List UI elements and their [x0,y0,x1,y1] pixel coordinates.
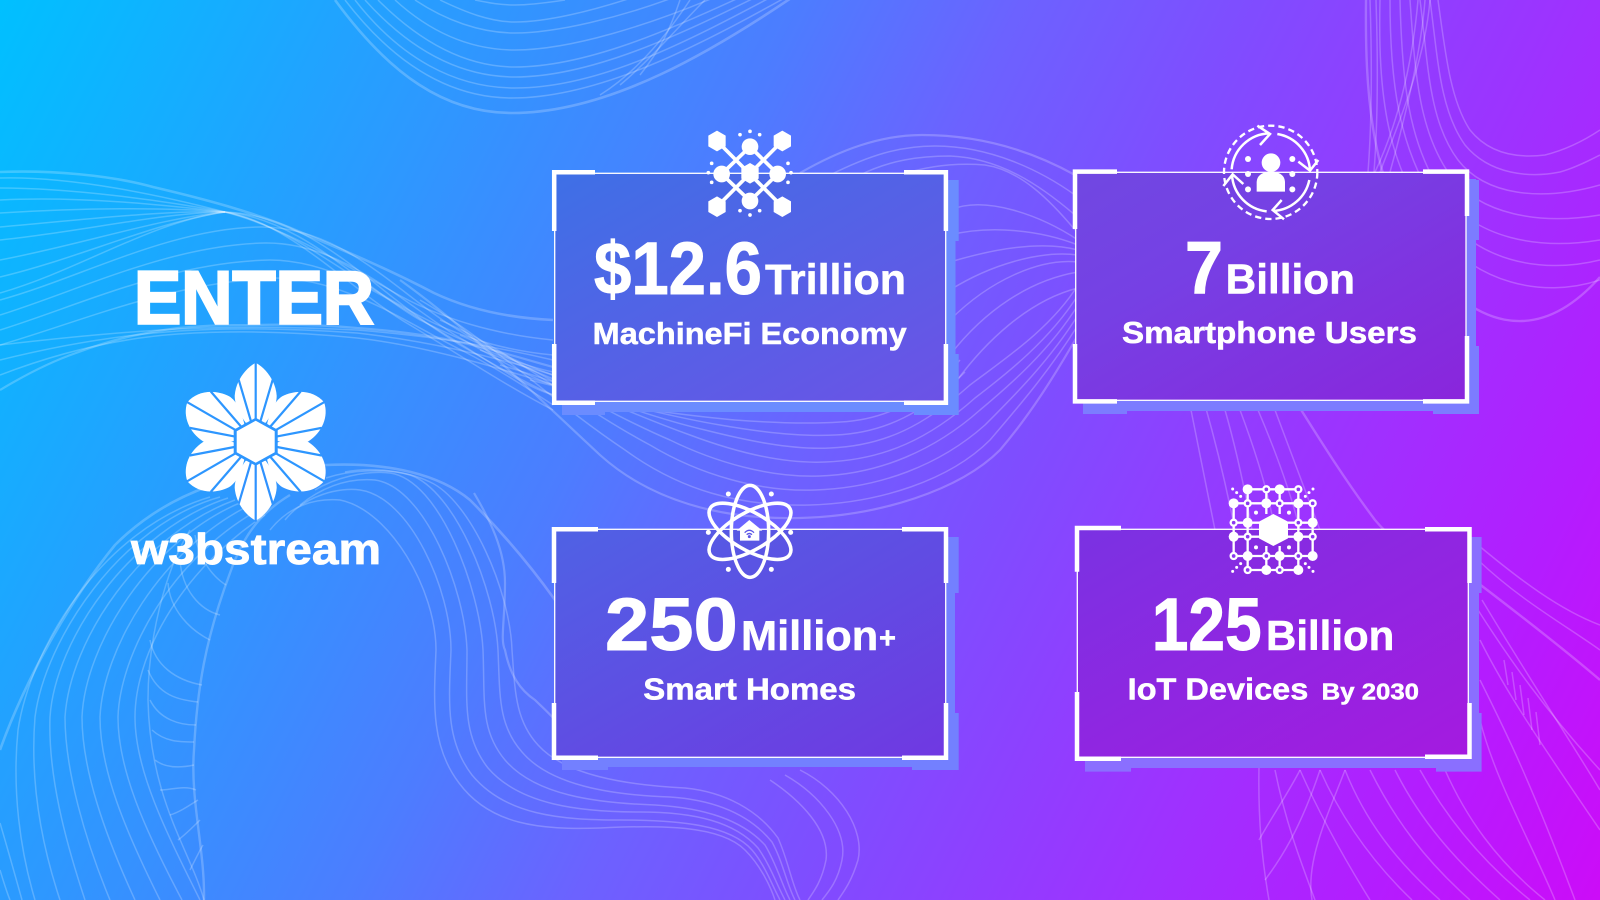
label: MachineFi Economy: MachineFi Economy [593,316,907,351]
label: IoT Devices By 2030 [1128,671,1419,706]
corner brackets [1077,528,1470,759]
figure: 250 Million+: + [879,622,896,655]
icon: atom with home [701,485,799,577]
panel: IoT devices [1077,484,1482,772]
figure: 250 Million+ [605,583,896,666]
corner brackets [554,529,946,758]
figure: $12.6 Trillion [594,227,906,310]
panel body [1077,529,1468,757]
figure: 125 Billion [1152,583,1394,666]
wordmark: w3bstream [130,525,381,574]
panel shadow [562,180,959,415]
panel body [555,529,946,757]
panel body [1076,172,1466,400]
figure: 7 Billion [1185,226,1355,309]
icon: network [706,129,793,217]
label: Smartphone Users: Smartphone Users [1122,315,1417,350]
panel: smartphone users [1075,126,1479,414]
panel: smart homes [554,485,959,770]
icon: user with cycle arrows [1223,126,1318,219]
label: IoT Devices By 2030: By 2030 [1322,678,1419,704]
panel shadow [1083,179,1479,414]
label: Smart Homes: Smart Homes [643,671,856,706]
panel: MachineFi economy [554,129,959,415]
figure: $12.6 Trillion: $12.6 [594,227,762,310]
corner brackets [554,172,946,403]
figure: 250 Million+: Million [741,612,878,659]
logo: w3bstream [130,362,381,574]
figure: 7 Billion: 7 [1185,226,1223,309]
figure: 125 Billion: Billion [1266,612,1394,659]
label: IoT Devices By 2030: IoT Devices [1128,671,1308,706]
icon: device lattice with hexagon [1229,484,1318,575]
figure: 250 Million+: 250 [605,583,738,666]
figure: 125 Billion: 125 [1152,583,1262,666]
panel shadow [1085,537,1482,772]
panel body [555,173,946,401]
figure: 7 Billion: Billion [1226,255,1355,302]
corner brackets [1075,172,1467,401]
panel shadow [562,537,959,770]
heading: ENTER: ENTER [134,256,374,340]
icon: six-petal flower [173,362,338,522]
figure: $12.6 Trillion: Trillion [765,256,906,304]
